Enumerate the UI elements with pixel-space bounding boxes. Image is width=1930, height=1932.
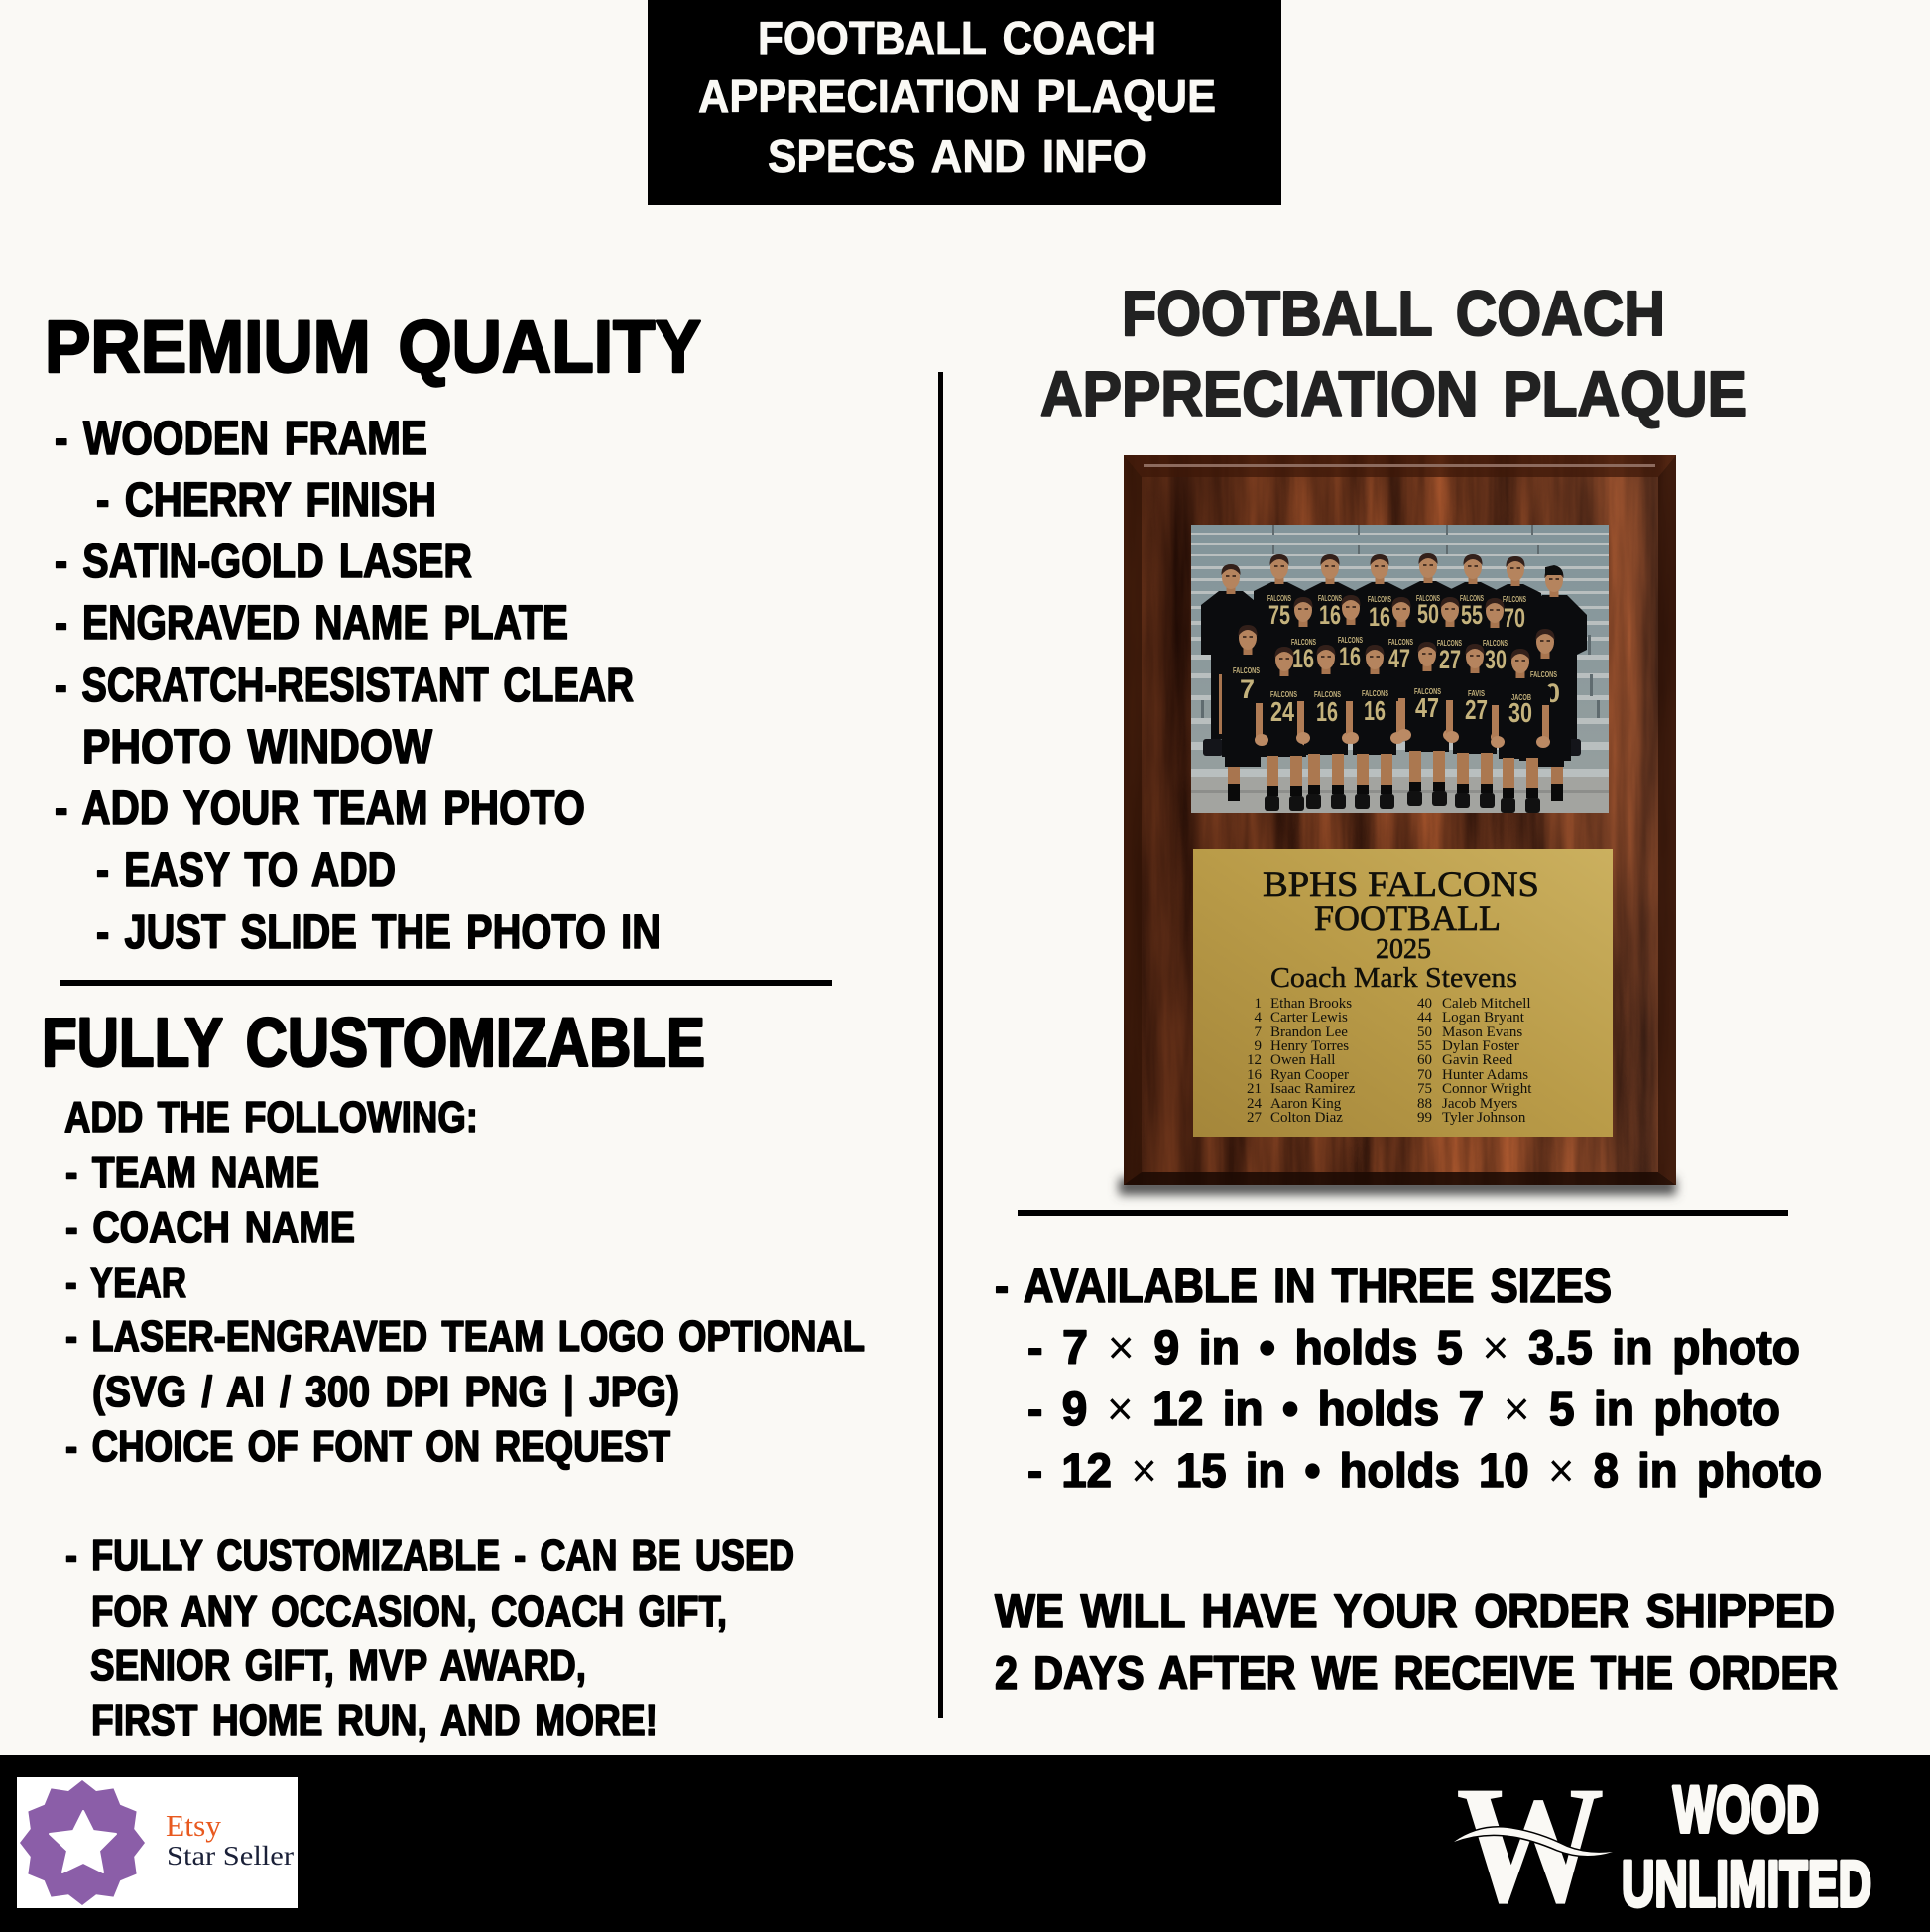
roster left column: Ethan Brooks [1270,996,1352,1012]
premium quality feature list: - ADD YOUR TEAM PHOTO [55,783,585,835]
roster left column: Ryan Cooper [1270,1067,1349,1083]
premium quality feature list: - JUST SLIDE THE PHOTO IN [96,906,661,959]
edge players: FALCONS [1530,670,1557,679]
roster right column: Tyler Johnson [1442,1110,1526,1126]
roster left column: Carter Lewis [1270,1010,1348,1026]
panel: sizes: - AVAILABLE IN THREE SIZES [995,1261,1612,1313]
back row players: FALCONS [1503,595,1526,604]
roster left column: 12 [1247,1052,1262,1068]
back row players: 75 [1268,600,1290,630]
plaque shadow [1119,1178,1676,1195]
front row players: FALCONS [1314,690,1341,699]
premium quality feature list [55,413,661,959]
roster right column: 50 [1417,1025,1432,1040]
middle row players: 27 [1439,645,1461,674]
panel: sizes: - 9 × 12 in • holds 7 × 5 in photo [1027,1384,1780,1436]
premium quality feature list: - CHERRY FINISH [96,474,436,527]
roster left column: Isaac Ramirez [1270,1081,1356,1097]
title banner: FOOTBALL COACH [758,12,1156,63]
middle row players: 47 [1388,644,1410,673]
edge players [1219,625,1571,801]
back row players: FALCONS [1318,594,1342,603]
roster right column: 55 [1417,1038,1432,1054]
coaches [1201,564,1587,756]
wordmark [1622,1772,1871,1920]
gold name plate [1193,849,1613,1137]
heading: fully customizable: FULLY CUSTOMIZABLE [42,1004,705,1081]
premium quality feature list: - ENGRAVED NAME PLATE [55,597,568,650]
roster right column: Gavin Reed [1442,1052,1513,1068]
plate heading: Coach Mark Stevens [1270,962,1517,994]
etsy star seller text: Star Seller [167,1841,294,1871]
roster left column: Henry Torres [1270,1038,1349,1054]
footer bar [0,1751,1930,1932]
shipping note: 2 DAYS AFTER WE RECEIVE THE ORDER [995,1646,1838,1699]
roster right column [1417,996,1532,1126]
customization options list: ADD THE FOLLOWING: [64,1093,478,1142]
back row players: 55 [1461,600,1483,630]
front row players: 16 [1364,695,1386,726]
plate heading: BPHS FALCONS [1263,864,1539,904]
icon: purple star badge [20,1780,145,1905]
shipping note [995,1584,1838,1699]
roster left column: Colton Diaz [1270,1110,1343,1126]
customization options list: - CHOICE OF FONT ON REQUEST [65,1422,670,1471]
back row players [1254,553,1541,688]
team photo [1191,525,1609,813]
back row players: FALCONS [1460,594,1484,603]
middle row players: FALCONS [1437,639,1462,648]
roster left column: 1 [1254,996,1262,1012]
front row players [1255,642,1550,813]
front row players: 47 [1415,692,1439,723]
etsy star seller badge [17,1777,298,1908]
back row players: FALCONS [1267,594,1291,603]
title banner: APPRECIATION PLAQUE [698,70,1216,122]
back row players: 70 [1504,603,1525,633]
edge players: 0 [1545,678,1560,708]
middle row players: FALCONS [1388,638,1413,647]
occasion note: SENIOR GIFT, MVP AWARD, [90,1641,586,1690]
edge players: FALCONS [1233,666,1260,675]
edge players: 7 [1240,674,1255,704]
wordmark: WOOD [1673,1772,1819,1846]
roster right column: 70 [1417,1067,1432,1083]
front row players: 16 [1316,696,1338,727]
roster right column: Mason Evans [1442,1025,1522,1040]
wood unlimited logo [1454,1751,1871,1932]
front row players: 30 [1508,697,1532,728]
roster right column: 99 [1417,1110,1432,1126]
premium quality feature list: - EASY TO ADD [96,844,396,897]
roster left column: 7 [1254,1025,1262,1040]
occasion note: FOR ANY OCCASION, COACH GIFT, [91,1587,727,1635]
wooden frame [1124,455,1676,1185]
heading: plaque name: APPRECIATION PLAQUE [1040,358,1747,429]
roster left column: 24 [1247,1096,1262,1112]
roster left column: 21 [1247,1081,1262,1097]
roster left column: Brandon Lee [1270,1025,1348,1040]
shipping note: WE WILL HAVE YOUR ORDER SHIPPED [995,1584,1835,1636]
roster right column: Connor Wright [1442,1081,1532,1097]
premium quality feature list: - SATIN-GOLD LASER [55,536,472,588]
roster left column: 27 [1247,1110,1262,1126]
middle row players: 16 [1292,644,1314,673]
roster right column: Hunter Adams [1442,1067,1528,1083]
etsy star seller text [166,1808,294,1871]
premium quality feature list: PHOTO WINDOW [82,721,433,774]
middle row players: 30 [1485,645,1507,674]
front row players: 24 [1270,696,1294,727]
back row players: 16 [1369,602,1390,632]
back row players: FALCONS [1368,595,1391,604]
premium quality feature list: - SCRATCH-RESISTANT CLEAR [55,660,634,712]
front row players: JACOB [1511,693,1531,702]
plate heading: FOOTBALL [1314,899,1501,938]
roster right column: 88 [1417,1096,1432,1112]
customization options list [64,1093,865,1471]
customization options list: (SVG / AI / 300 DPI PNG | JPG) [92,1368,679,1417]
middle row players: FALCONS [1483,639,1508,648]
roster left column: 9 [1254,1038,1262,1054]
etsy star seller text: Etsy [166,1808,221,1843]
panel: sizes [995,1261,1822,1498]
roster left column [1247,996,1356,1126]
customization options list: - COACH NAME [65,1203,355,1252]
front row players: FAVIS [1468,689,1485,698]
plate heading [1263,864,1539,994]
customization options list: - LASER-ENGRAVED TEAM LOGO OPTIONAL [65,1312,865,1361]
plaque [1119,455,1676,1195]
back row players: FALCONS [1416,594,1440,603]
front row players: FALCONS [1270,690,1297,699]
back row players: 16 [1319,600,1341,630]
panel: premium quality [45,305,701,959]
roster left column: 4 [1254,1010,1262,1026]
middle row players [1277,595,1520,730]
roster right column: 40 [1417,996,1432,1012]
panel: sizes: - 7 × 9 in • holds 5 × 3.5 in photo [1027,1322,1800,1375]
customization options list: - TEAM NAME [65,1148,319,1197]
roster left column: Owen Hall [1270,1052,1335,1068]
premium quality feature list: - WOODEN FRAME [55,413,427,465]
heading: plaque name: FOOTBALL COACH [1122,278,1665,349]
occasion note: FIRST HOME RUN, AND MORE! [91,1696,658,1745]
panel: fully customizable [42,1004,865,1745]
plate heading: 2025 [1376,934,1431,965]
roster right column: Caleb Mitchell [1442,996,1531,1012]
roster right column: 44 [1417,1010,1432,1026]
front row players: 27 [1465,694,1488,725]
middle row players: 16 [1339,642,1361,671]
front row players: FALCONS [1414,687,1441,696]
back row players: 50 [1417,599,1439,629]
title banner: SPECS AND INFO [768,130,1146,181]
heading: plaque name [1040,278,1747,429]
panel: sizes: - 12 × 15 in • holds 10 × 8 in photo [1027,1445,1822,1498]
bleacher rows [1191,533,1609,777]
roster left column: Aaron King [1270,1096,1342,1112]
roster right column: 75 [1417,1081,1432,1097]
customization options list: - YEAR [65,1259,186,1307]
heading: premium quality: PREMIUM QUALITY [45,305,701,388]
occasion note: - FULLY CUSTOMIZABLE - CAN BE USED [65,1531,794,1580]
title banner [648,0,1281,205]
middle row players: FALCONS [1338,636,1363,645]
bleacher supports [1201,525,1600,718]
roster right column: Jacob Myers [1442,1096,1517,1112]
occasion note [65,1531,794,1745]
roster right column: 60 [1417,1052,1432,1068]
middle row players: FALCONS [1291,638,1316,647]
roster left column: 16 [1247,1067,1262,1083]
roster right column: Dylan Foster [1442,1038,1519,1054]
front row players: FALCONS [1362,689,1388,698]
roster right column: Logan Bryant [1442,1010,1525,1026]
